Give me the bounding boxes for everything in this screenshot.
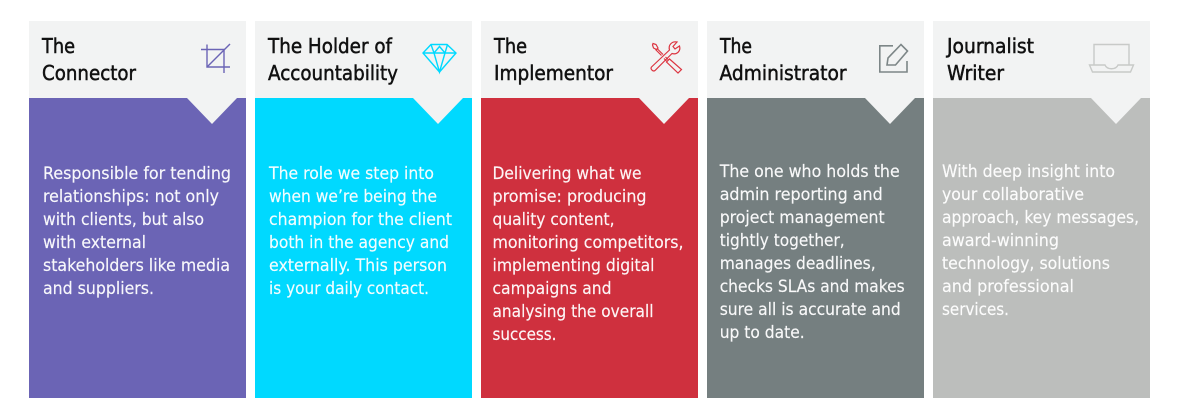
heading: The Holder of Accountability: The Holder of	[267, 34, 393, 58]
description: Implementor: monitoring competitors,	[492, 233, 684, 253]
description: Implementor: analysing the overall	[492, 302, 654, 322]
heading: The Administrator	[719, 34, 847, 85]
description: Connector: with external	[43, 233, 146, 253]
description: Administrator: checks SLAs and makes	[720, 277, 905, 297]
heading: The Holder of Accountability	[267, 34, 398, 85]
heading: The Administrator: The	[719, 34, 752, 58]
panel: The Administrator	[707, 21, 924, 398]
description: Administrator: up to date.	[720, 323, 805, 343]
panel body: cyan	[255, 21, 472, 398]
description: Administrator: manages deadlines,	[720, 254, 876, 274]
description: Implementor: campaigns and	[492, 279, 612, 299]
description: Journalist Writer: award-winning	[942, 231, 1059, 251]
heading: The Connector	[41, 34, 137, 85]
description: Connector: with clients, but also	[43, 210, 204, 230]
heading: Journalist Writer	[945, 34, 1034, 85]
description: Holder of Accountability: The role we step into	[268, 164, 434, 184]
description: Connector: stakeholders like media	[43, 256, 230, 276]
description: Implementor: quality content,	[492, 210, 614, 230]
description: Implementor: promise: producing	[492, 187, 646, 207]
description: Implementor: Delivering what we	[492, 164, 642, 184]
description: Holder of Accountability: both in the agency and	[269, 233, 449, 253]
description: Administrator: The one who holds the	[719, 162, 900, 182]
description: Holder of Accountability: champion for the client	[269, 210, 452, 230]
description: Administrator: admin reporting and	[720, 185, 883, 205]
description: Administrator: tightly together,	[720, 231, 845, 251]
description: Connector: Responsible for tending	[43, 164, 231, 184]
header band with notch	[255, 21, 472, 124]
description: Journalist Writer	[942, 162, 1139, 320]
description: Journalist Writer: and professional	[942, 277, 1074, 297]
heading: The Administrator: Administrator	[720, 61, 847, 85]
icon: laptop	[1090, 44, 1134, 72]
heading: The Implementor: Implementor	[494, 61, 614, 85]
header band with notch	[707, 21, 924, 124]
panel body: light grey	[933, 21, 1150, 398]
heading: The Implementor	[493, 34, 614, 85]
panel body: red	[481, 21, 698, 398]
panel body: slate grey	[707, 21, 924, 398]
heading: Journalist Writer: Journalist	[945, 34, 1034, 58]
description: Administrator: project management	[720, 208, 885, 228]
heading: The Implementor: The	[493, 34, 527, 58]
panel: The Implementor	[481, 21, 698, 398]
icon: edit pencil	[880, 44, 908, 72]
description: Journalist Writer: With deep insight into	[942, 162, 1115, 182]
description: Connector: and suppliers.	[43, 279, 154, 299]
description: Implementor: success.	[492, 325, 556, 345]
description: Holder of Accountability: externally. This person	[269, 256, 447, 276]
heading: Journalist Writer: Writer	[947, 61, 1005, 85]
panel: The Holder of Accountability	[255, 21, 472, 398]
panel: Journalist Writer	[933, 21, 1150, 398]
description: Journalist Writer: technology, solutions	[942, 254, 1110, 274]
heading: The Connector: The	[41, 34, 75, 58]
description: Journalist Writer: approach, key messages,	[942, 208, 1139, 228]
description: Holder of Accountability	[268, 164, 452, 299]
description: Journalist Writer: your collaborative	[942, 185, 1084, 205]
description: Implementor	[492, 164, 684, 345]
description: Holder of Accountability: is your daily contact.	[269, 279, 429, 299]
description: Administrator: sure all is accurate and	[720, 300, 901, 320]
icon: diamond	[423, 44, 456, 72]
panel: The Connector	[29, 21, 246, 398]
description: Administrator	[719, 162, 905, 343]
header band with notch	[933, 21, 1150, 124]
heading: The Connector: Connector	[42, 61, 137, 85]
description: Implementor: implementing digital	[492, 256, 654, 276]
header band with notch	[481, 21, 698, 124]
icon: crop	[201, 44, 230, 73]
header band with notch	[29, 21, 246, 124]
description: Holder of Accountability: when we’re being the	[269, 187, 437, 207]
panel body: purple	[29, 21, 246, 398]
description: Connector: relationships: not only	[43, 187, 219, 207]
description: Journalist Writer: services.	[942, 300, 1009, 320]
icon: wrench and screwdriver	[651, 42, 682, 73]
heading: The Holder of Accountability: Accountability	[268, 61, 398, 85]
description: Connector	[43, 164, 231, 299]
